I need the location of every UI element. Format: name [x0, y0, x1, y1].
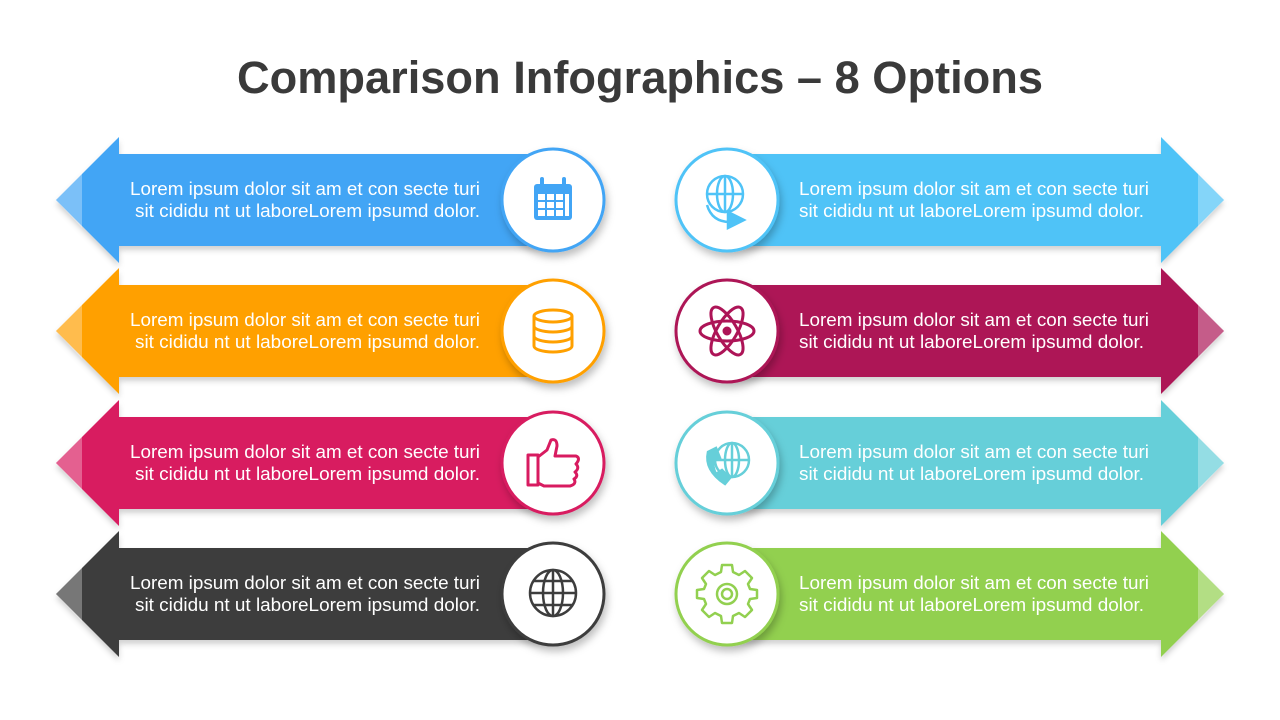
- title: Comparison Infographics – 8 Options: [237, 52, 1043, 103]
- option 4: dark left arrow: sit cididu nt ut laboreLorem ipsumd dolor.: [135, 595, 480, 615]
- option 1: blue left arrow: sit cididu nt ut laboreLorem ipsumd dolor.: [135, 201, 480, 221]
- icon: phone globe: [707, 443, 749, 484]
- option 8: green right arrow: [676, 531, 1224, 657]
- icon: atom: [700, 303, 754, 359]
- icon: thumbs up: [528, 440, 578, 486]
- option 8: green right arrow: sit cididu nt ut laboreLorem ipsumd dolor.: [799, 595, 1144, 615]
- option 7: teal right arrow: Lorem ipsum dolor sit am et con secte turi: [799, 442, 1149, 462]
- option 4: dark left arrow: Lorem ipsum dolor sit am et con secte turi: [130, 573, 480, 593]
- option 5: light blue right arrow: sit cididu nt ut laboreLorem ipsumd dolor.: [799, 201, 1144, 221]
- option 7: teal right arrow: [676, 400, 1224, 526]
- option 6: magenta right arrow: [676, 268, 1224, 394]
- icon: globe with arrow: [707, 176, 744, 228]
- option 2: orange left arrow: Lorem ipsum dolor sit am et con secte turi: [130, 310, 480, 330]
- option 6: magenta right arrow: Lorem ipsum dolor sit am et con secte turi: [799, 310, 1149, 330]
- option 5: light blue right arrow: [676, 137, 1224, 263]
- option 2: orange left arrow: sit cididu nt ut laboreLorem ipsumd dolor.: [135, 332, 480, 352]
- icon: calendar: [534, 177, 572, 220]
- option 7: teal right arrow: sit cididu nt ut laboreLorem ipsumd dolor.: [799, 464, 1144, 484]
- option 1: blue left arrow: Lorem ipsum dolor sit am et con secte turi: [130, 179, 480, 199]
- option 8: green right arrow: Lorem ipsum dolor sit am et con secte turi: [799, 573, 1149, 593]
- option 3: pink left arrow: [56, 400, 604, 526]
- option 5: light blue right arrow: Lorem ipsum dolor sit am et con secte turi: [799, 179, 1149, 199]
- option 3: pink left arrow: sit cididu nt ut laboreLorem ipsumd dolor.: [135, 464, 480, 484]
- icon: database: [534, 310, 572, 352]
- option 6: magenta right arrow: sit cididu nt ut laboreLorem ipsumd dolor.: [799, 332, 1144, 352]
- icon: globe: [530, 570, 576, 616]
- option 4: dark left arrow: [56, 531, 604, 657]
- icon: gear: [697, 565, 757, 623]
- option 3: pink left arrow: Lorem ipsum dolor sit am et con secte turi: [130, 442, 480, 462]
- option 2: orange left arrow: [56, 268, 604, 394]
- option 1: blue left arrow: [56, 137, 604, 263]
